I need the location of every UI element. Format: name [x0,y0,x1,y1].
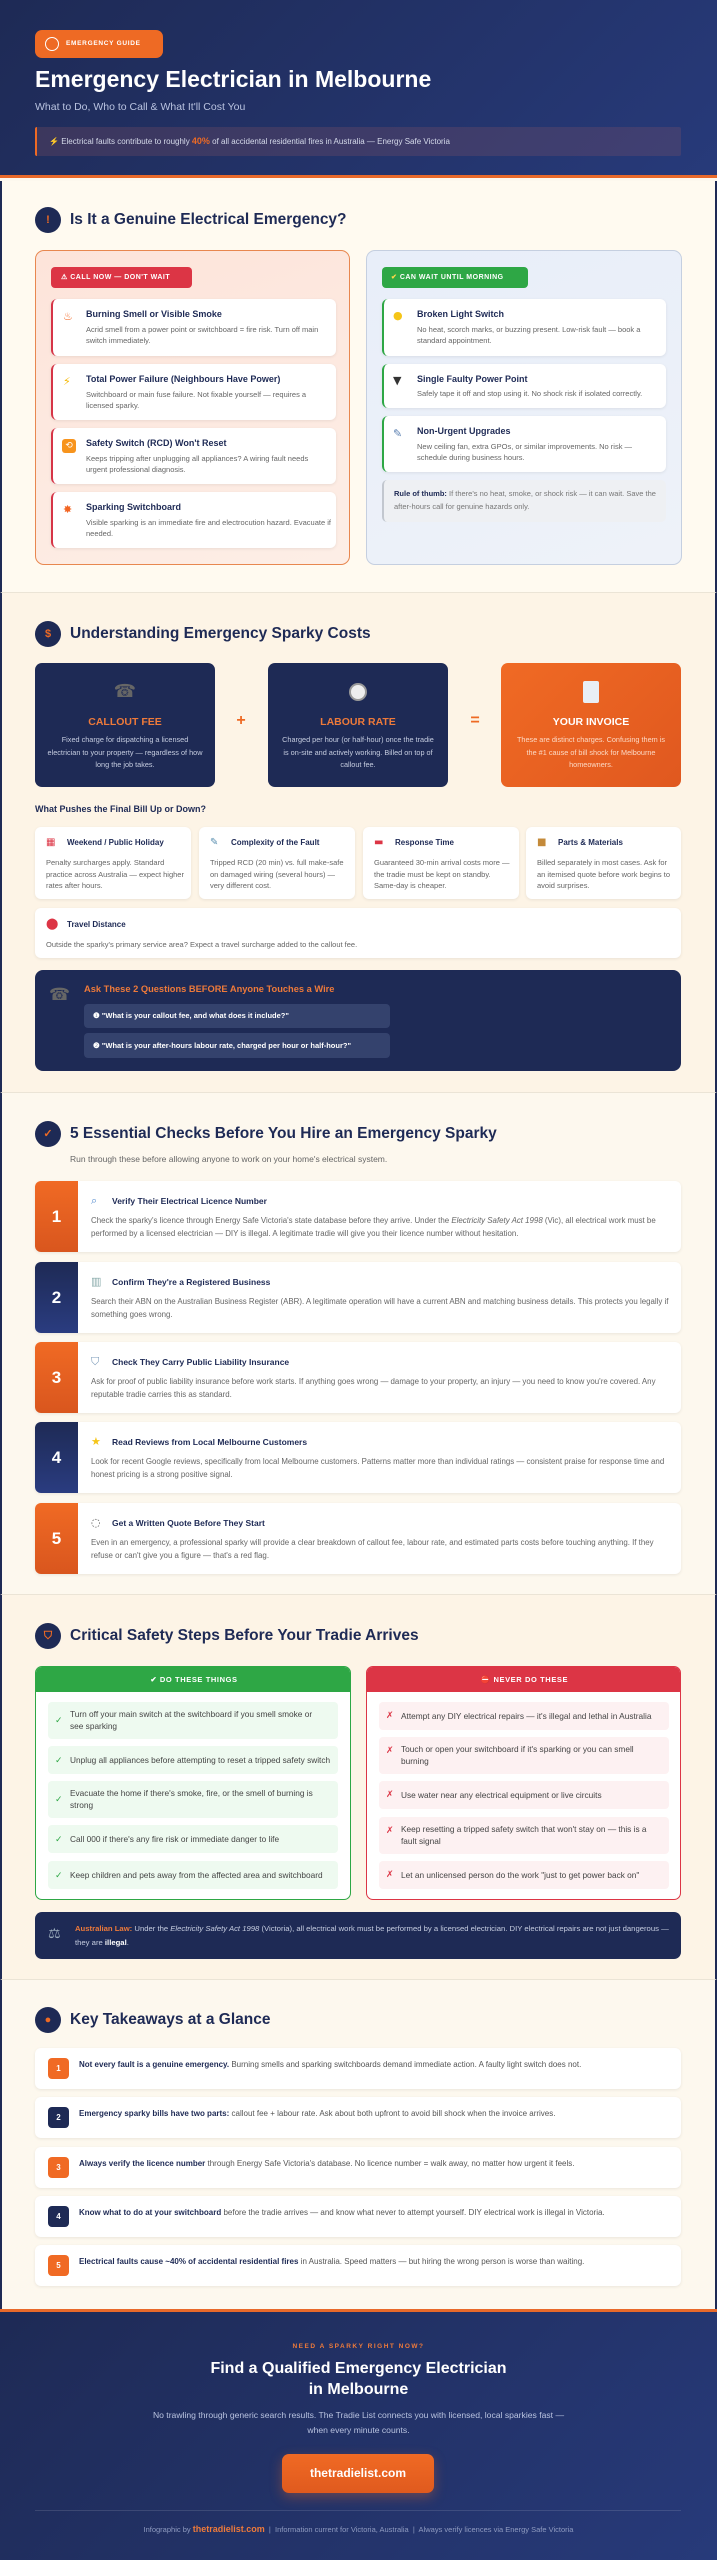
callout: australian law: ⚖ [48,1926,61,1942]
card: upgrades [382,416,666,472]
button [282,2454,434,2493]
factor: complexity: Tripped RCD (20 min) vs. full make-safe on damaged wiring (several hours) — very different cost. [210,858,344,890]
tag [51,267,192,288]
heading 4: Critical Safety Steps Before Your Tradie Arrives [70,1627,419,1644]
cost card: invoice [501,663,681,787]
factor: response [363,827,519,899]
heading 3 [35,1121,497,1147]
panel: do [35,1666,351,1900]
factor: travel: Travel Distance [67,920,126,929]
panel: never: ✗ [386,1789,394,1799]
heading 4: ⛉ [44,1630,52,1642]
section 3: checks [0,1093,717,1595]
check 2: 2 [52,1288,61,1307]
panel: do: ✓ [55,1870,63,1880]
factor: travel: Outside the sparky's primary service area? Expect a travel surcharge added to the callout fee. [46,940,357,949]
card: power point: Safely tape it off and stop using it. No shock risk if isolated correctly. [417,389,642,398]
panel: can wait [366,250,682,565]
title: Emergency Electrician in Melbourne [35,66,431,92]
factor: complexity: Complexity of the Fault [231,838,319,847]
panel: never: Let an unlicensed person do the work "just to get power back on" [401,1870,639,1880]
card: burning: ♨ [63,310,73,323]
rule of thumb: Rule of thumb: If there's no heat, smoke, or shock risk — it can wait. Save the after-hours call for genuine hazards only. [394,489,656,511]
factor: weekend [35,827,191,899]
heading 1: ! [46,214,50,226]
section 5: takeaways [0,1980,717,2309]
check 4: 4 [52,1448,61,1467]
callout: questions: ❷ "What is your after-hours labour rate, charged per hour or half-hour?" [93,1041,351,1050]
factor: response: Guaranteed 30-min arrival costs more — the tradie must be kept on standby. Same-day is cheaper. [374,858,509,890]
check 3: ⛉ [91,1355,99,1368]
panel: do: ✓ [55,1834,63,1844]
check 3: Ask for proof of public liability insurance before work starts. If anything goes wrong — damage to your property, an injury — you need to know you're covered. Any reputable tradie carries this as standard. [91,1377,656,1399]
card: power failure: ⚡ [63,375,71,388]
card: sparking: ✸ [63,503,72,516]
check 4: Look for recent Google reviews, specifically from local Melbourne customers. Patterns matter more than individual ratings — consistent praise for response time and honest pricing is a strong positive signal. [91,1457,664,1479]
takeaway 1: Not every fault is a genuine emergency. Burning smells and sparking switchboards demand immediate action. A faulty light switch does not. [79,2060,581,2069]
tag: ✔ CAN WAIT UNTIL MORNING [391,274,504,281]
panel: call now [35,250,350,565]
heading 3: ✓ [43,1128,53,1140]
card: power point: Single Faulty Power Point [417,374,528,384]
stat bar [35,127,681,156]
panel: do: Keep children and pets away from the affected area and switchboard [70,1870,323,1880]
callout: questions: Ask These 2 Questions BEFORE Anyone Touches a Wire [84,984,334,994]
panel: never: Keep resetting a tripped safety switch that won't stay on — this is a fault signal [401,1824,647,1846]
credits: Infographic by thetradielist.com | Information current for Victoria, Australia | Always verify licences via Energy Safe Victoria [144,2524,573,2534]
check 2: ▥ [91,1275,101,1288]
panel: never: Touch or open your switchboard if it's sparking or you can smell burning [401,1744,634,1766]
equals: = [470,712,480,729]
button: thetradielist.com [310,2466,406,2480]
panel: do: Evacuate the home if there's smoke, fire, or the smell of burning is strong [70,1788,313,1810]
card: sparking [51,492,336,548]
takeaway 1: 1 [56,2064,61,2073]
takeaway 2: Emergency sparky bills have two parts: callout fee + labour rate. Ask about both upfront to avoid bill shock when the invoice arrives. [79,2109,555,2118]
check 2: Search their ABN on the Australian Business Register (ABR). A legitimate operation will have a current ABN and matching business details. This protects you legally if something goes wrong. [91,1297,668,1319]
heading 2 [35,621,371,647]
panel: do: ✓ [55,1715,63,1725]
callout: questions [35,970,681,1071]
check 1: 1 [52,1207,61,1226]
card: light switch: No heat, scorch marks, or buzzing present. Low-risk fault — book a standard appointment. [417,325,640,345]
cost card: callout [35,663,215,787]
check 5 [35,1503,681,1574]
callout: australian law [35,1912,681,1959]
card: power point [382,364,666,408]
panel: never: ⛔ NEVER DO THESE [481,1675,568,1684]
cost card: callout: Fixed charge for dispatching a licensed electrician to your property — regardless of how long the job takes. [48,735,202,769]
card: power failure [51,364,336,420]
section 2: costs [0,593,717,1093]
check 1 [35,1181,681,1252]
takeaway 4: 4 [56,2212,61,2221]
takeaway 2 [35,2097,681,2138]
cost card: labour: Charged per hour (or half-hour) once the tradie is on-site and actively working. Billed on top of callout fee. [282,735,434,769]
card: light switch: ● [393,309,403,322]
heading 1: Is It a Genuine Electrical Emergency? [70,211,347,228]
heading 4 [35,1623,419,1649]
check 5: Get a Written Quote Before They Start [112,1518,265,1528]
factor: weekend: Penalty surcharges apply. Standard practice across Australia — expect higher rates after hours. [46,858,184,890]
check 5: Even in an emergency, a professional sparky will provide a clear breakdown of callout fee, labour rate, and estimated parts costs before touching anything. If they refuse or can't give you a figure — that's a red flag. [91,1538,654,1560]
panel: never [366,1666,681,1900]
rule of thumb [382,480,666,522]
takeaway 2: 2 [56,2113,61,2122]
factor: travel [35,908,681,958]
panel: never: ✗ [386,1745,394,1755]
panel: do: ✔ DO THESE THINGS [150,1675,238,1684]
check 1: Check the sparky's licence through Energy Safe Victoria's state database before they arrive. Under the Electricity Safety Act 1998 (Vic), all electrical work must be performed by a licensed electrician — DIY is illegal. A legitimate tradie will give you their licence number without hesitation. [91,1216,656,1238]
card: rcd [51,428,336,484]
cost card: labour: LABOUR RATE [320,716,396,728]
card: sparking: Sparking Switchboard [86,502,181,512]
card: power point: ▼ [393,374,401,387]
cost card: callout: ☎ [114,681,136,702]
panel: do: ✓ [55,1794,63,1804]
factor: parts: Billed separately in most cases. Ask for an itemised quote before work begins to avoid surprises. [537,858,670,890]
card: upgrades: ✎ [393,427,402,440]
card: light switch [382,299,666,356]
panel: never: ✗ [386,1710,394,1720]
check 3: Check They Carry Public Liability Insurance [112,1357,289,1367]
card: rcd: Safety Switch (RCD) Won't Reset [86,438,226,448]
card: upgrades: New ceiling fan, extra GPOs, or similar improvements. No risk — schedule during business hours. [417,442,632,462]
factor: weekend: ▦ [46,837,55,848]
check 5: ◌ [91,1516,101,1529]
takeaway 3: 3 [56,2163,61,2172]
subtitle 3: Run through these before allowing anyone to work on your home's electrical system. [70,1154,387,1164]
header [0,0,717,178]
eyebrow: NEED A SPARKY RIGHT NOW? [292,2343,425,2350]
card: sparking: Visible sparking is an immediate fire and electrocution hazard. Evacuate if needed. [86,518,331,538]
panel: never: Use water near any electrical equipment or live circuits [401,1790,602,1800]
card: burning: Burning Smell or Visible Smoke [86,309,222,319]
footer [0,2309,717,2560]
factor: response: Response Time [395,838,454,847]
check 3 [35,1342,681,1413]
card: light switch: Broken Light Switch [417,309,504,319]
panel: do: Unplug all appliances before attempting to reset a tripped safety switch [70,1755,330,1765]
tag: ⚠ CALL NOW — DON'T WAIT [61,274,170,281]
factor: complexity [199,827,355,899]
cost card: labour [268,663,448,787]
check 4: ★ [91,1435,101,1448]
check 4 [35,1422,681,1493]
check 1: ⌕ [91,1194,97,1207]
cost card: invoice: YOUR INVOICE [553,716,629,728]
check 5: 5 [52,1529,61,1548]
factor: parts [526,827,681,899]
panel: never: ✗ [386,1869,394,1879]
takeaway 4: Know what to do at your switchboard before the tradie arrives — and know what never to attempt yourself. DIY electrical work is illegal in Victoria. [79,2208,605,2217]
heading 2: Understanding Emergency Sparky Costs [70,625,371,642]
check 2: Confirm They're a Registered Business [112,1277,270,1287]
subtitle: What to Do, Who to Call & What It'll Cost You [35,101,245,113]
check 4: Read Reviews from Local Melbourne Customers [112,1437,307,1447]
panel: never: Attempt any DIY electrical repairs — it's illegal and lethal in Australia [401,1711,651,1721]
cost card: invoice: These are distinct charges. Confusing them is the #1 cause of bill shock for Melbourne homeowners. [517,735,665,769]
takeaway 3 [35,2147,681,2188]
takeaway 5: 5 [56,2261,61,2270]
card: rcd: ⟲ [65,441,73,451]
cost card: callout: CALLOUT FEE [88,716,162,728]
factor: response: ▬ [374,837,383,848]
panel: do: Call 000 if there's any fire risk or immediate danger to life [70,1834,279,1844]
factor: parts: Parts & Materials [558,838,623,847]
check 3: 3 [52,1368,61,1387]
stat bar: ⚡ Electrical faults contribute to roughly 40% of all accidental residential fires in Australia — Energy Safe Victoria [49,136,450,146]
heading 3: 5 Essential Checks Before You Hire an Emergency Sparky [70,1125,497,1142]
check 1: Verify Their Electrical Licence Number [112,1196,267,1206]
badge [35,30,163,58]
cta title: in Melbourne [309,2381,408,2398]
heading 2: $ [45,628,51,640]
factor: travel: ⬤ [46,917,58,930]
panel: never: ✗ [386,1825,394,1835]
cta title: Find a Qualified Emergency Electrician [210,2360,507,2377]
factor: parts: ■ [537,837,546,848]
tag [382,267,528,288]
panel: do: ✓ [55,1755,63,1765]
check 2 [35,1262,681,1333]
badge: EMERGENCY GUIDE [66,40,141,47]
takeaway 3: Always verify the licence number through Energy Safe Victoria's database. No licence number = walk away, no matter how urgent it feels. [79,2159,574,2168]
card: burning [51,299,336,356]
card: power failure: Total Power Failure (Neighbours Have Power) [86,374,280,384]
card: upgrades: Non-Urgent Upgrades [417,426,511,436]
card: burning: Acrid smell from a power point or switchboard = fire risk. Turn off main switch immediately. [86,325,318,345]
callout: questions: ❶ "What is your callout fee, and what does it include?" [93,1011,289,1020]
subheading: what pushes: What Pushes the Final Bill Up or Down? [35,804,206,814]
callout: questions: ☎ [49,985,70,1005]
heading 5 [35,2007,270,2033]
section 4: safety [0,1595,717,1980]
heading 5: ● [45,2014,51,2026]
callout: australian law: Australian Law: Under the Electricity Safety Act 1998 (Victoria), all electrical work must be performed by a licensed electrician. DIY electrical repairs are not just dangerous — they are illegal. [75,1924,669,1947]
factor: complexity: ✎ [210,837,218,848]
takeaway 1 [35,2048,681,2089]
takeaway 4 [35,2196,681,2237]
cta title [210,2360,507,2398]
takeaway 5 [35,2245,681,2286]
card: power failure: Switchboard or main fuse failure. Not fixable yourself — requires a licensed sparky. [86,390,306,410]
cta text: No trawling through generic search results. The Tradie List connects you with licensed, local sparkies fast — when every minute counts. [153,2410,564,2434]
panel: do: Turn off your main switch at the switchboard if you smell smoke or see sparking [70,1709,312,1731]
plus: + [236,712,246,729]
heading 5: Key Takeaways at a Glance [70,2011,270,2028]
takeaway 5: Electrical faults cause ~40% of accidental residential fires in Australia. Speed matters — but hiring the wrong person is worse than waiting. [79,2257,584,2266]
factor: weekend: Weekend / Public Holiday [67,838,164,847]
card: rcd: Keeps tripping after unplugging all appliances? A wiring fault needs urgent professional diagnosis. [86,454,308,474]
section 1: emergency [0,181,717,593]
heading 1 [35,207,347,233]
